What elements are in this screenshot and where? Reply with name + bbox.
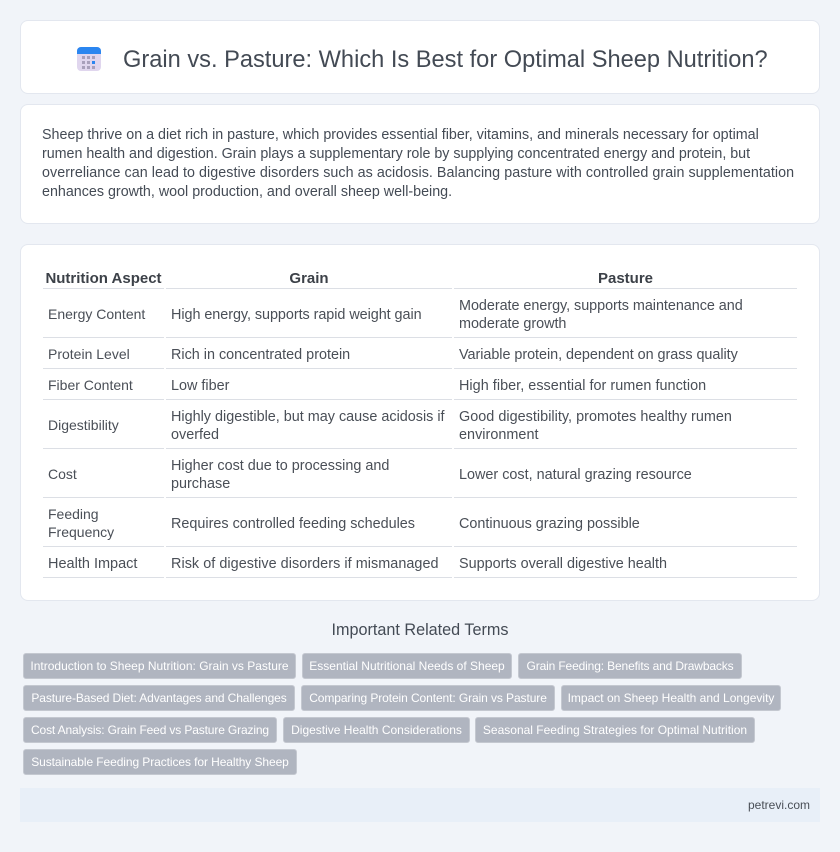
related term tags: Essential Nutritional Needs of Sheep — [309, 659, 505, 673]
comparison table: Lower cost, natural grazing resource — [459, 467, 692, 483]
title: Grain vs. Pasture: Which Is Best for Optimal Sheep Nutrition? — [123, 47, 768, 73]
comparison table: Fiber Content — [48, 377, 133, 393]
panel: introduction text — [20, 104, 820, 224]
icon: calendar — [77, 47, 101, 71]
comparison table: Nutrition Aspect — [45, 270, 162, 287]
heading: related terms: Important Related Terms — [332, 621, 508, 639]
related term tags: Sustainable Feeding Practices for Healthy Sheep — [31, 755, 289, 769]
related term tags: Pasture-Based Diet: Advantages and Challenges — [31, 691, 287, 705]
comparison table: Energy Content — [48, 306, 145, 322]
comparison table: Continuous grazing possible — [459, 516, 640, 532]
comparison table: Health Impact — [48, 556, 137, 572]
related term tags: Cost Analysis: Grain Feed vs Pasture Grazing — [31, 723, 269, 737]
comparison table: High energy, supports rapid weight gain — [171, 307, 422, 323]
related term tags: Grain Feeding: Benefits and Drawbacks — [527, 659, 733, 673]
footer source: petrevi.com — [748, 798, 810, 812]
comparison table — [43, 270, 797, 578]
comparison table: Higher cost due to processing and — [171, 458, 389, 474]
intro paragraph: Sheep thrive on a diet rich in pasture, which provides essential fiber, vitamins, and minerals necessary for optimal — [42, 127, 759, 143]
comparison table: Digestibility — [48, 417, 119, 433]
related term tags — [23, 653, 781, 775]
comparison table: Good digestibility, promotes healthy rumen — [459, 409, 732, 425]
comparison table: Grain — [289, 270, 329, 287]
related term tags: Comparing Protein Content: Grain vs Pasture — [309, 691, 547, 705]
comparison table: Feeding — [48, 506, 99, 522]
comparison table: overfed — [171, 427, 219, 443]
footer bar — [20, 788, 820, 822]
comparison table: purchase — [171, 476, 230, 492]
comparison table: High fiber, essential for rumen function — [459, 378, 706, 394]
comparison table: Risk of digestive disorders if mismanaged — [171, 556, 439, 572]
panel: header — [20, 20, 820, 94]
intro paragraph: enhances growth, wool production, and overall sheep well-being. — [42, 184, 452, 200]
comparison table: Frequency — [48, 524, 114, 540]
comparison table: Supports overall digestive health — [459, 556, 667, 572]
panel: comparison table — [20, 244, 820, 601]
comparison table: Requires controlled feeding schedules — [171, 516, 415, 532]
comparison table: environment — [459, 427, 539, 443]
intro paragraph: overreliance can lead to digestive disorders such as acidosis. Balancing pasture with controlled grain supplementation — [42, 165, 794, 181]
comparison table: Cost — [48, 466, 77, 482]
comparison table: moderate growth — [459, 316, 566, 332]
comparison table: Moderate energy, supports maintenance and — [459, 298, 743, 314]
related term tags: Seasonal Feeding Strategies for Optimal Nutrition — [483, 723, 747, 737]
comparison table: Rich in concentrated protein — [171, 347, 350, 363]
related term tags: Impact on Sheep Health and Longevity — [568, 691, 774, 705]
related term tags: Introduction to Sheep Nutrition: Grain vs Pasture — [30, 659, 289, 673]
intro paragraph — [42, 127, 794, 200]
comparison table: Highly digestible, but may cause acidosis if — [171, 409, 445, 425]
comparison table: Protein Level — [48, 346, 130, 362]
related term tags: Digestive Health Considerations — [291, 723, 462, 737]
comparison table: Low fiber — [171, 378, 229, 394]
comparison table: Pasture — [598, 270, 653, 287]
comparison table: Variable protein, dependent on grass quality — [459, 347, 738, 363]
intro paragraph: rumen health and digestion. Grain plays a supplementary role by supplying concentrated energy and protein, but — [42, 146, 750, 162]
